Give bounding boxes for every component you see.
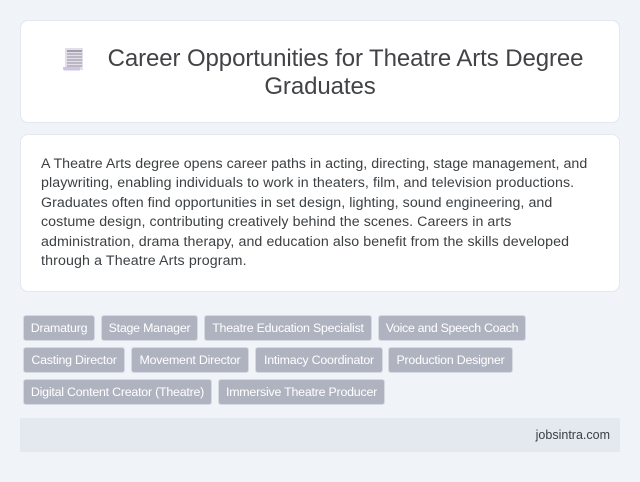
tag: Digital Content Creator (Theatre) bbox=[23, 379, 212, 405]
tag: Intimacy Coordinator: Intimacy Coordinator bbox=[264, 353, 374, 367]
tag: Production Designer: Production Designer bbox=[396, 353, 505, 367]
tag: Immersive Theatre Producer: Immersive Theatre Producer bbox=[226, 385, 377, 399]
description text bbox=[41, 156, 587, 269]
tag: Theatre Education Specialist: Theatre Education Specialist bbox=[212, 321, 364, 335]
description text: administration, drama therapy, and education also benefit from the skills developed bbox=[41, 234, 569, 250]
tag: Voice and Speech Coach bbox=[378, 315, 526, 341]
tag: Casting Director bbox=[23, 347, 125, 373]
footer bar bbox=[20, 418, 620, 452]
tag: Intimacy Coordinator bbox=[255, 347, 383, 373]
career tags bbox=[23, 315, 526, 405]
tag: Stage Manager: Stage Manager bbox=[109, 321, 190, 335]
tag: Immersive Theatre Producer bbox=[218, 379, 385, 405]
tag: Voice and Speech Coach: Voice and Speech Coach bbox=[386, 321, 518, 335]
tag: Production Designer bbox=[388, 347, 513, 373]
description text: A Theatre Arts degree opens career paths in acting, directing, stage management, and bbox=[41, 156, 587, 172]
tag: Movement Director: Movement Director bbox=[140, 353, 240, 367]
footer source text: jobsintra.com bbox=[536, 428, 610, 442]
description text: through a Theatre Arts program. bbox=[41, 253, 247, 269]
header panel bbox=[20, 20, 620, 123]
title: Career Opportunities for Theatre Arts Degree bbox=[108, 45, 583, 72]
description text: playwriting, enabling individuals to work in theaters, film, and television productions. bbox=[41, 175, 574, 191]
tag: Casting Director: Casting Director bbox=[31, 353, 117, 367]
tag: Theatre Education Specialist bbox=[204, 315, 372, 341]
title: Graduates bbox=[264, 73, 376, 100]
description text: Graduates often find opportunities in set design, lighting, sound engineering, and bbox=[41, 195, 552, 211]
tag: Digital Content Creator (Theatre): Digital Content Creator (Theatre) bbox=[31, 385, 204, 399]
tag: Dramaturg: Dramaturg bbox=[31, 321, 87, 335]
title bbox=[108, 45, 583, 100]
icon: document scroll bbox=[63, 48, 83, 70]
tag: Dramaturg bbox=[23, 315, 95, 341]
description panel bbox=[20, 134, 620, 292]
tag: Movement Director bbox=[131, 347, 249, 373]
description text: costume design, contributing creatively behind the scenes. Careers in arts bbox=[41, 214, 511, 230]
tag: Stage Manager bbox=[101, 315, 198, 341]
